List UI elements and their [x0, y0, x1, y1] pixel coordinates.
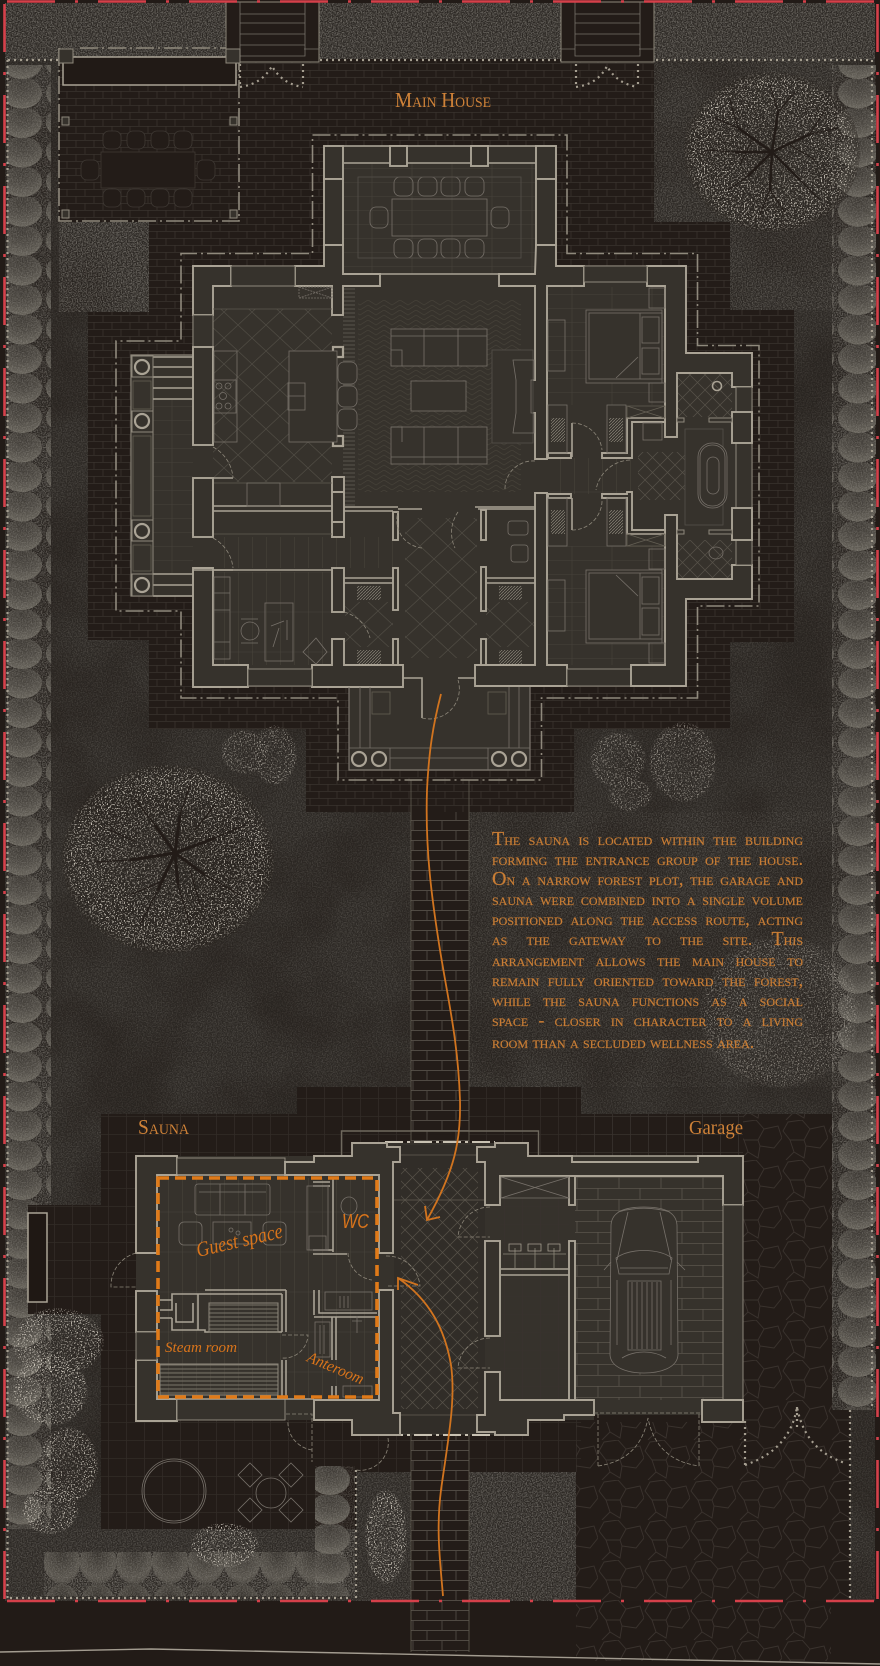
- dining table: [358, 177, 521, 258]
- tree: left: [62, 765, 274, 953]
- patio: round hot tub: [142, 1459, 206, 1523]
- description text: The sauna is located within the building: [492, 828, 803, 850]
- handwritten label: steam room: Steam room: [165, 1340, 237, 1356]
- closet hatching by the entry: [357, 586, 522, 664]
- slab: [136, 1143, 743, 1435]
- central passage: [385, 1142, 495, 1435]
- walls: dining bay: [324, 146, 556, 245]
- description text: sauna were combined into a single volume: [492, 889, 803, 909]
- main house plan: [131, 146, 752, 770]
- floor patterns: [153, 163, 732, 665]
- hedge: right: [832, 65, 876, 1410]
- paving: brick texture: [59, 59, 794, 812]
- description text: while the sauna functions as a social: [492, 990, 803, 1010]
- main house eaves line: [116, 135, 759, 780]
- description text: positioned along the access route, acting: [492, 909, 803, 929]
- living room sofas and table: [391, 329, 534, 464]
- sauna door swings: [111, 1253, 420, 1470]
- heading: sauna: Sauna: [138, 1115, 189, 1139]
- storage room: [458, 1177, 569, 1368]
- paving: main house terrace: [59, 59, 794, 812]
- garage floor: [575, 1177, 723, 1400]
- description text: forming the entrance group of the house.: [492, 849, 803, 869]
- walls: cross junctions: [295, 245, 584, 686]
- outer roof line: [342, 1131, 538, 1156]
- steam room benches: [160, 1303, 278, 1395]
- walls: left side: [193, 266, 631, 687]
- sauna furniture: [179, 1184, 372, 1397]
- arrow: route to the sauna: [398, 1278, 453, 1596]
- shrubs by the sauna: [12, 1308, 259, 1567]
- handwritten label: guest space: Guest space: [194, 1219, 285, 1262]
- kitchen: [213, 287, 357, 442]
- stairs: top left: [226, 2, 319, 62]
- walls: right side and bath: [548, 266, 752, 686]
- garage walls: [477, 1143, 743, 1435]
- road edge line: [0, 1649, 880, 1664]
- description text: remain fully oriented toward the forest,: [492, 970, 803, 990]
- garden gate dots: [745, 1407, 845, 1465]
- heading: main house: Main House: [395, 88, 491, 112]
- stairs: top right: [561, 2, 654, 62]
- interior door swings: [213, 423, 630, 719]
- paving: lower road: [0, 1601, 880, 1666]
- hedge: bottom row: [44, 1466, 407, 1596]
- bedroom closets: [548, 405, 665, 546]
- sauna walls: [136, 1143, 400, 1435]
- paving: sauna and garage court: [28, 1087, 850, 1601]
- car: [604, 1207, 685, 1373]
- pergola: [59, 48, 240, 221]
- office furniture: [214, 577, 327, 664]
- terrace with columns: [131, 355, 193, 596]
- brick path: [411, 780, 469, 1652]
- hedge: left: [7, 65, 51, 1560]
- storage floor: [500, 1198, 569, 1400]
- description text: [492, 828, 803, 1052]
- entrance porch: [349, 678, 530, 770]
- handwritten label: WC: WC: [342, 1211, 369, 1233]
- shrubs by the main house: [221, 722, 717, 811]
- gate dots: [240, 64, 638, 87]
- tree: top right: [684, 72, 860, 232]
- description text: On a narrow forest plot, the garage and: [492, 868, 803, 890]
- sauna interior walls: [160, 1177, 377, 1398]
- description text: space - closer in character to a living: [492, 1010, 803, 1030]
- lawn beds beside the path: [5, 1472, 576, 1601]
- pergola table: [81, 131, 215, 207]
- description text: room than a secluded wellness area.: [492, 1032, 754, 1052]
- description text: as the gateway to the site. This: [492, 928, 803, 950]
- heading: garage: Garage: [689, 1117, 743, 1139]
- dashed sauna zone highlight: [158, 1178, 377, 1397]
- patio: round table and chairs: [238, 1463, 303, 1522]
- bedrooms: [548, 288, 665, 663]
- sauna and garage building: [111, 1131, 845, 1470]
- description text: arrangement allows the main house to: [492, 950, 803, 970]
- floor slab: [131, 146, 752, 770]
- bench by the sauna: [28, 1213, 47, 1302]
- arrow: route to the main house: [425, 694, 460, 1220]
- garage gates: [598, 1414, 699, 1466]
- tree: right dim, behind the text: [700, 936, 860, 1088]
- handwritten label: anteroom: Anteroom: [304, 1349, 366, 1388]
- sauna floor: [158, 1178, 378, 1398]
- bathroom fixtures: [508, 382, 727, 562]
